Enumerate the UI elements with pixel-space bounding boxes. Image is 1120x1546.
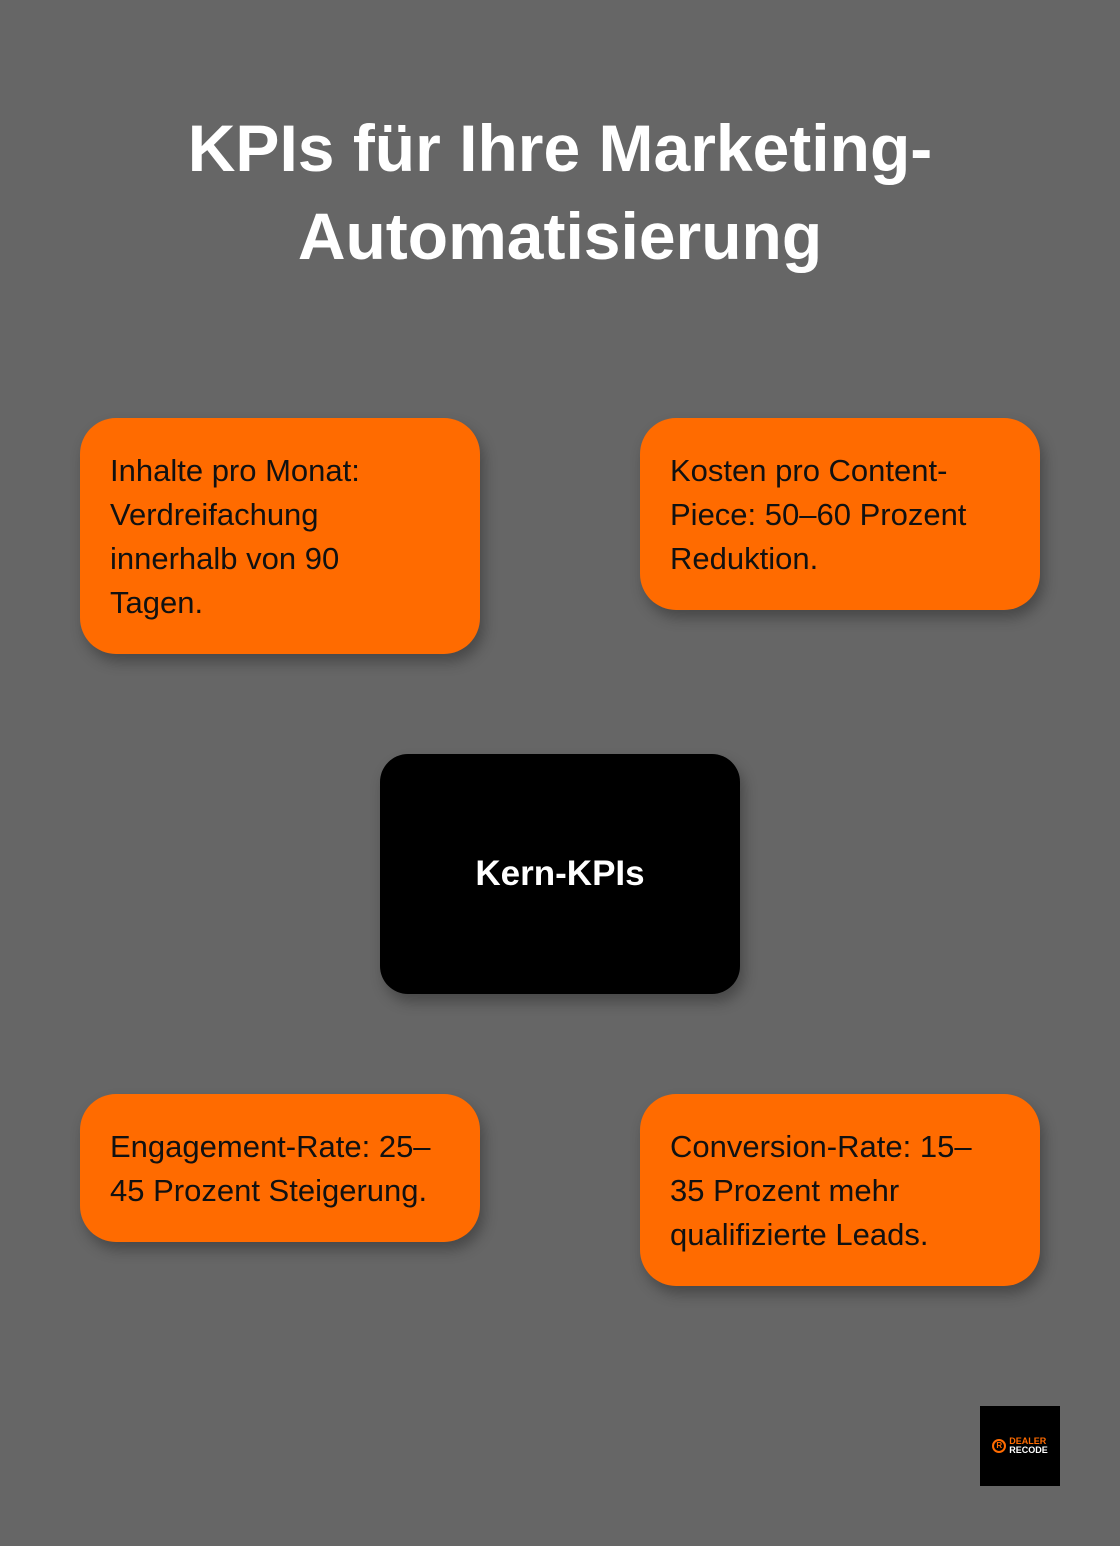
card: engagement rate: 45 Prozent Steigerung. bbox=[110, 1173, 427, 1208]
title: Automatisierung bbox=[298, 199, 822, 273]
card: engagement rate: Engagement-Rate: 25– bbox=[110, 1129, 431, 1164]
card: content per month: Inhalte pro Monat: bbox=[110, 453, 360, 488]
logo: R bbox=[996, 1441, 1002, 1450]
card: engagement rate bbox=[80, 1094, 480, 1242]
center: core KPIs bbox=[380, 754, 740, 994]
logo bbox=[980, 1406, 1060, 1486]
title: KPIs für Ihre Marketing- bbox=[188, 111, 932, 185]
card: conversion rate: 35 Prozent mehr bbox=[670, 1173, 899, 1208]
card: conversion rate: Conversion-Rate: 15– bbox=[670, 1129, 972, 1164]
card: cost per content piece: Reduktion. bbox=[670, 541, 818, 576]
card: cost per content piece: Kosten pro Content- bbox=[670, 453, 947, 488]
card: conversion rate: qualifizierte Leads. bbox=[670, 1217, 928, 1252]
logo: DEALER bbox=[1009, 1436, 1046, 1446]
card: content per month: Verdreifachung bbox=[110, 497, 319, 532]
card: cost per content piece bbox=[640, 418, 1040, 610]
card: content per month bbox=[80, 418, 480, 654]
title bbox=[188, 111, 932, 273]
center: core KPIs: Kern-KPIs bbox=[475, 854, 645, 893]
logo: RECODE bbox=[1009, 1445, 1048, 1455]
card: cost per content piece: Piece: 50–60 Prozent bbox=[670, 497, 966, 532]
card: conversion rate bbox=[640, 1094, 1040, 1286]
card: content per month: Tagen. bbox=[110, 585, 203, 620]
card: content per month: innerhalb von 90 bbox=[110, 541, 339, 576]
